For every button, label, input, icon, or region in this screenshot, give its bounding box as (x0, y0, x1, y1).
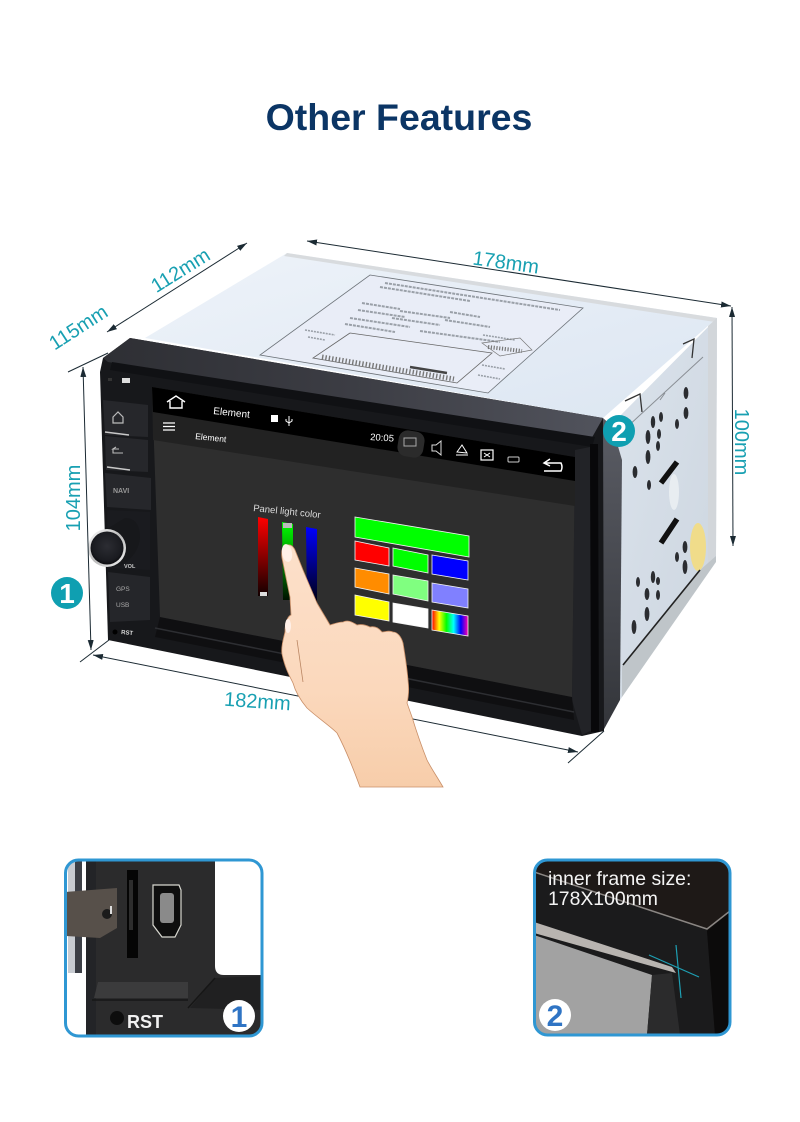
product: car stereo unit (88, 253, 717, 736)
panel: detail 1 RST port (65, 860, 262, 1036)
panel light color label: Panel light color (253, 503, 321, 521)
grey screen (534, 935, 652, 1035)
dimension: 182mm line (93, 655, 578, 752)
front bezel (100, 338, 604, 736)
volume knob (88, 518, 140, 567)
left button column: USB (116, 602, 129, 609)
number 1 (223, 1000, 255, 1034)
silver inner bezel (534, 922, 676, 973)
lower panel steps (94, 982, 188, 998)
card slot (127, 870, 138, 958)
number 2 (539, 999, 571, 1033)
left button column (88, 378, 151, 637)
status bar icons (163, 396, 562, 471)
bottom bezel groove (155, 617, 574, 720)
status bar text: Element (195, 431, 227, 444)
panel: detail 2 inner frame (534, 860, 730, 1035)
dimension labels: 178mm (471, 248, 540, 279)
status bar text: 20:05 (370, 432, 394, 445)
left button column: NAVI (113, 488, 129, 495)
colour swatches (355, 517, 469, 636)
dimension labels: 104mm (63, 465, 85, 531)
upper highlight (534, 872, 730, 929)
top metal face with wiring label (145, 253, 717, 418)
status bar text (195, 406, 394, 445)
right inner frame (572, 447, 592, 735)
dimension lines: ticks (68, 241, 733, 763)
left button column: RST (121, 630, 134, 637)
dimension labels: 112mm (147, 244, 214, 298)
dimension labels: 182mm (223, 689, 291, 715)
side metal chassis with holes (612, 318, 717, 700)
colour sliders (258, 517, 317, 602)
number 2: 2 (547, 1000, 563, 1033)
hand pointing (281, 543, 443, 787)
left button column: VOL (124, 564, 136, 570)
top bezel strip (103, 338, 603, 441)
badge 1: 1 (59, 578, 75, 609)
mini USB port (153, 885, 181, 937)
status bar text: Element (213, 406, 251, 421)
dimension labels (45, 244, 752, 715)
left button column: GPS (116, 586, 130, 593)
dimension labels: 100mm (730, 409, 752, 475)
RST label: RST (127, 1012, 163, 1032)
title: Other Features (266, 96, 532, 138)
badge 1 (51, 577, 83, 609)
reset hole (110, 1011, 124, 1025)
panel: detail 2 inner frame: 178X100mm (548, 888, 658, 910)
white background areas (215, 860, 262, 975)
badge 2 (603, 415, 635, 447)
dimension labels: 115mm (45, 301, 112, 355)
frame size text: inner frame size: (548, 868, 691, 890)
metal clip (65, 888, 117, 938)
front right side rail (590, 418, 622, 733)
number 1: 1 (231, 1001, 247, 1034)
screen (152, 387, 575, 697)
badge 2: 2 (611, 416, 627, 447)
blue cross marks (649, 945, 699, 998)
